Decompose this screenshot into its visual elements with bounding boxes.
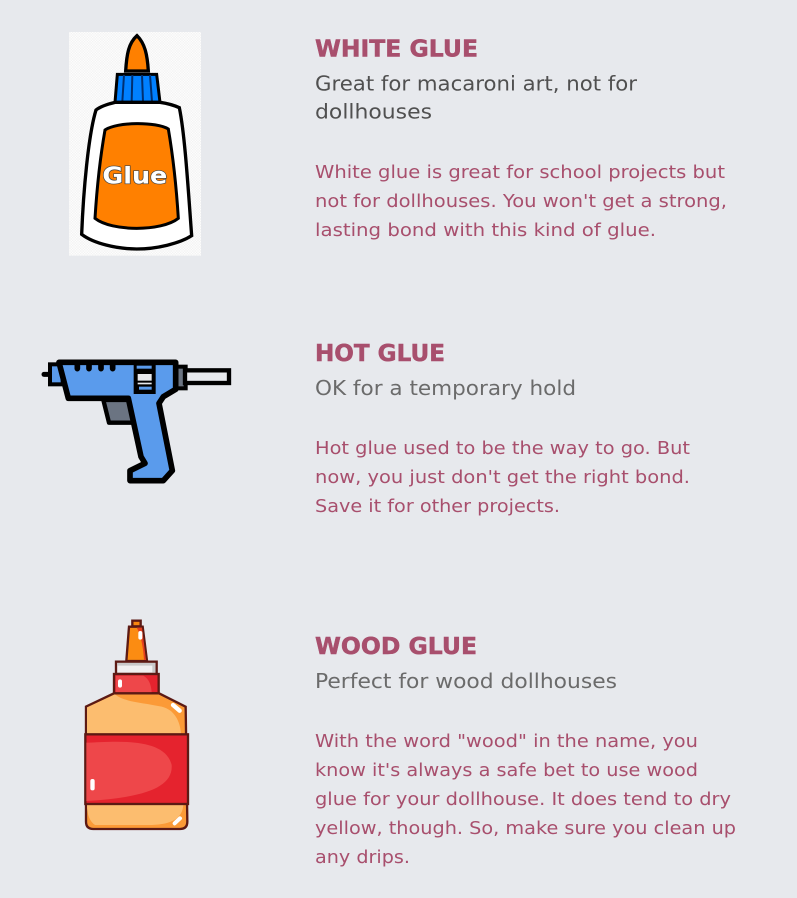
text block: white glue description: lasting bond with this kind of glue. bbox=[315, 221, 656, 241]
icon: white glue bottle: Glue bbox=[102, 162, 167, 190]
text block: hot glue description: Hot glue used to be the way to go. But bbox=[315, 439, 690, 459]
subtitle: white glue: dollhouses bbox=[315, 100, 432, 124]
subtitle: wood glue: Perfect for wood dollhouses bbox=[315, 669, 617, 693]
icon: hot glue gun bbox=[44, 362, 229, 481]
text block: wood glue description: know it's always a safe bet to use wood bbox=[315, 761, 698, 781]
text block: wood glue description: any drips. bbox=[315, 848, 410, 868]
text block: wood glue description: glue for your dollhouse. It does tend to dry bbox=[315, 790, 731, 810]
heading: white glue: WHITE GLUE bbox=[315, 36, 478, 62]
icon: wood glue bottle bbox=[85, 621, 188, 829]
heading: wood glue: WOOD GLUE bbox=[315, 634, 477, 660]
heading: hot glue: HOT GLUE bbox=[315, 341, 445, 367]
text block: hot glue description bbox=[315, 439, 690, 517]
text block: white glue description: White glue is great for school projects but bbox=[315, 163, 725, 183]
text block: wood glue description: yellow, though. So, make sure you clean up bbox=[315, 819, 736, 839]
subtitle: white glue: Great for macaroni art, not for bbox=[315, 72, 638, 96]
subtitle: hot glue: OK for a temporary hold bbox=[315, 376, 576, 400]
text block: white glue description: not for dollhouses. You won't get a strong, bbox=[315, 192, 727, 212]
text block: hot glue description: now, you just don't get the right bond. bbox=[315, 468, 690, 488]
text block: wood glue description: With the word "wood" in the name, you bbox=[315, 732, 698, 752]
text block: wood glue description bbox=[315, 732, 736, 868]
subtitle: white glue bbox=[315, 72, 638, 124]
text block: white glue description bbox=[315, 163, 727, 241]
icon: white glue bottle bbox=[69, 32, 201, 256]
text block: hot glue description: Save it for other projects. bbox=[315, 497, 560, 517]
